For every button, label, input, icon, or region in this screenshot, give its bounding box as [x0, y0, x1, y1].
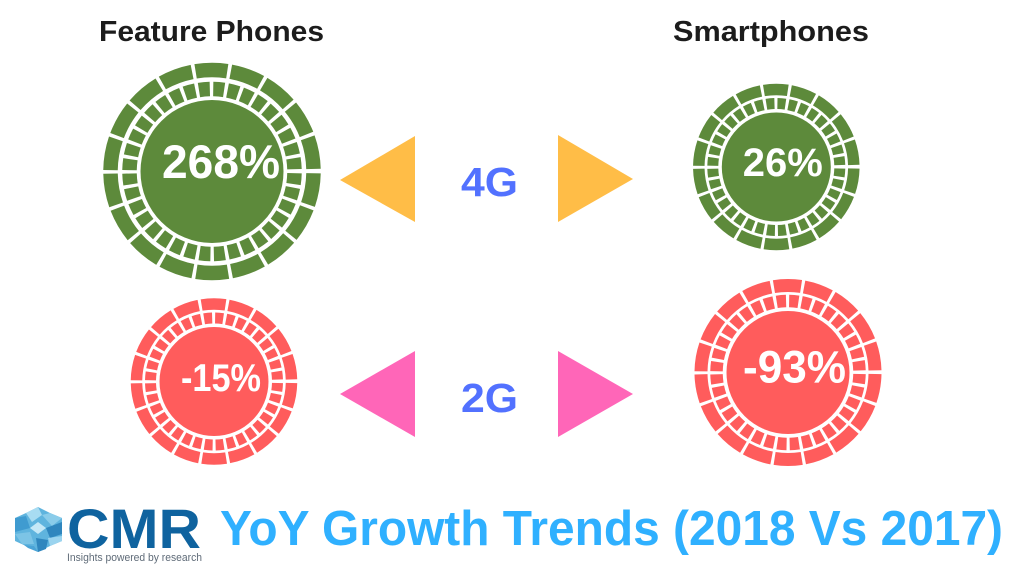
arrow: 4G left — [340, 136, 415, 222]
gauge: smartphones 2G -93% — [701, 286, 875, 460]
value: -15%: -15% — [181, 357, 261, 400]
label: 4G: 4G — [461, 159, 518, 205]
logo: CMR — [15, 497, 202, 564]
value: 26%: 26% — [743, 141, 823, 185]
heading: Feature Phones: Feature Phones — [99, 16, 324, 48]
gauge: smartphones 4G 26% — [699, 90, 854, 244]
title: YoY Growth Trends (2018 Vs 2017) — [220, 502, 1003, 556]
tagline: Insights powered by research — [67, 552, 202, 564]
arrow: 4G right — [558, 135, 633, 222]
value: -93%: -93% — [743, 342, 846, 392]
wordmark: CMR — [67, 497, 201, 560]
gauge: feature phones 2G -15% — [136, 304, 292, 459]
gauge: feature phones 4G 268% — [110, 70, 314, 273]
arrow: 2G right — [558, 351, 633, 437]
value: 268%: 268% — [162, 135, 280, 188]
arrow: 2G left — [340, 351, 415, 437]
heading: Smartphones: Smartphones — [673, 16, 869, 48]
label: 2G: 2G — [461, 375, 518, 421]
icon: cube cluster — [15, 507, 62, 552]
